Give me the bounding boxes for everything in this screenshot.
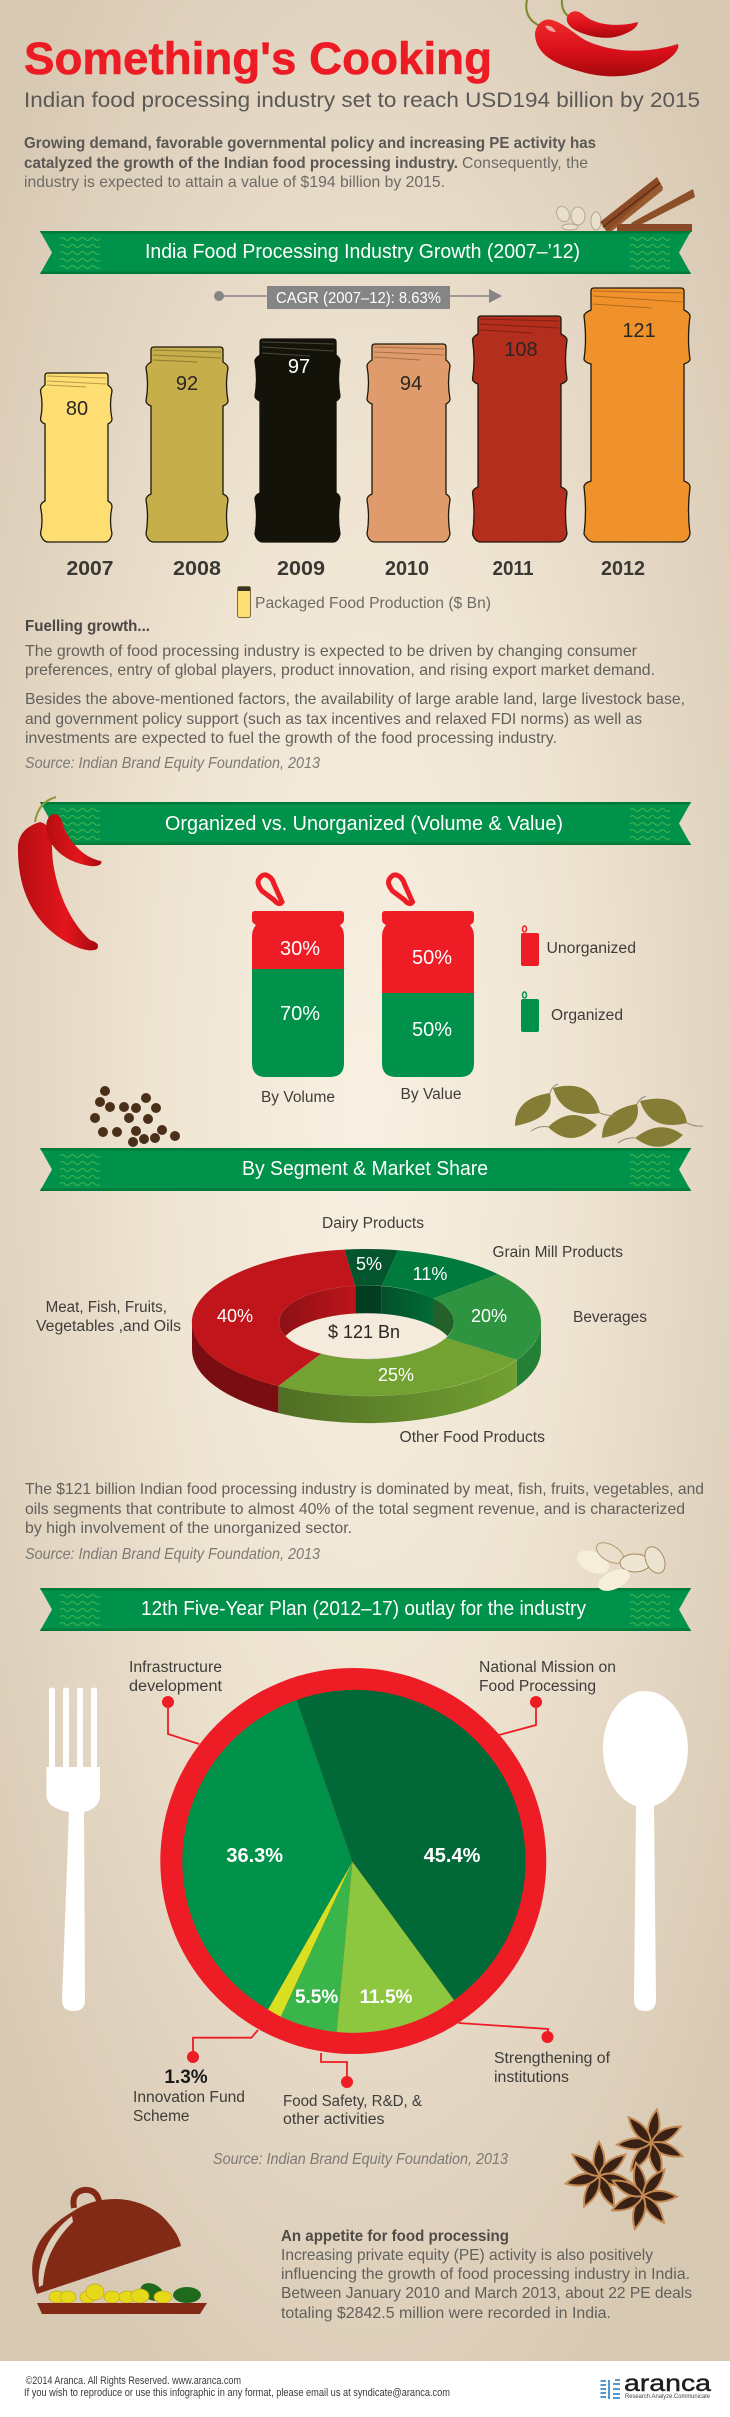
section banner: segment and market share	[40, 1148, 691, 1191]
text block: an appetite for food processing: influencing the growth of food processing industry in India.	[281, 2266, 690, 2283]
pie values: 5.5%	[295, 1987, 338, 2008]
icon: star anise	[565, 2104, 691, 2235]
segment: meat, fish, fruits, vegetables and oils 40%	[192, 1250, 355, 1386]
legend: unorganized: Unorganized	[546, 940, 636, 957]
callout: national mission: National Mission on	[479, 1659, 616, 1676]
bar: 2007	[40, 373, 114, 580]
jar: by volume: 30%	[280, 938, 320, 960]
donut walls	[192, 1322, 541, 1423]
logo: aranca	[600, 2370, 711, 2400]
bar: 2009: 2009	[277, 558, 325, 580]
text block: an appetite for food processing: totaling $2842.5 million were recorded in India.	[281, 2305, 611, 2322]
donut value labels: 25%	[378, 1365, 414, 1385]
text block: fuelling growth: preferences, entry of global players, product innovation, and rising export market demand.	[25, 662, 655, 679]
section banner: organized vs unorganized: Organized vs. Unorganized (Volume & Value)	[165, 813, 563, 835]
segment: dairy products 5%	[344, 1249, 398, 1286]
icon: fork	[46, 1688, 100, 2011]
intro paragraph: Growing demand, favorable governmental policy and increasing PE activity has	[24, 135, 596, 152]
icon: red chillies	[526, 0, 678, 76]
icon: hanging chillies	[18, 797, 101, 950]
text block: segment commentary: by high involvement of the unorganized sector.	[25, 1520, 352, 1537]
subtitle: Indian food processing industry set to reach USD194 billion by 2015	[24, 89, 700, 112]
title: Something's Cooking	[24, 33, 492, 84]
callout: innovation fund	[133, 2030, 258, 2125]
jar: by volume	[252, 875, 344, 1106]
text block: fuelling growth	[25, 618, 685, 772]
legend: unorganized	[521, 926, 636, 966]
bar: 2010: 94	[400, 373, 422, 395]
bar: 2011: 108	[504, 339, 538, 361]
donut value labels: 40%	[217, 1306, 253, 1326]
chart legend: Packaged Food Production ($ Bn)	[255, 595, 491, 612]
legend: organized	[521, 992, 623, 1032]
callout: innovation fund: 1.3%	[164, 2067, 208, 2088]
icon: peppercorns	[90, 1086, 180, 1147]
donut category labels: Other Food Products	[400, 1429, 545, 1446]
bar: 2007: 80	[66, 398, 88, 420]
text block: segment commentary	[25, 1481, 704, 1563]
bar: 2008: 2008	[173, 558, 221, 580]
bar: 2012: 121	[622, 320, 656, 342]
slice: national mission 45.4%	[297, 1690, 526, 2000]
copyright text: ©2014 Aranca. All Rights Reserved. www.aranca.com	[26, 2375, 241, 2387]
icon: spoon	[603, 1691, 688, 2011]
text block: segment commentary: oils segments that contribute to almost 40% of the total segment revenue, and is characterized	[25, 1501, 685, 1518]
pie values	[226, 1845, 481, 2008]
header	[24, 0, 700, 232]
donut value labels: $ 121 Bn	[328, 1322, 400, 1342]
bar chart: packaged food production	[40, 286, 690, 618]
icon: garlic cloves	[573, 1539, 669, 1595]
slice: strengthening of institutions 11.5%	[337, 1862, 454, 2033]
segment: grain mill products 11%	[382, 1250, 498, 1299]
section banner: organized vs unorganized	[40, 802, 691, 845]
icon: cloche with coins and money	[32, 2190, 207, 2314]
text block: fuelling growth: The growth of food processing industry is expected to be driven by changing consumer	[25, 643, 638, 660]
copyright text	[24, 2375, 450, 2399]
source note: Source: Indian Brand Equity Foundation, 2013	[213, 2151, 508, 2168]
callout: infrastructure development	[129, 1659, 223, 1744]
text block: an appetite for food processing: Increasing private equity (PE) activity is also positively	[281, 2247, 653, 2264]
jar: by value	[382, 875, 474, 1103]
text block: fuelling growth: Besides the above-mentioned factors, the availability of large arable land, large livestock base,	[25, 691, 685, 708]
callout: infrastructure development: Infrastructure	[129, 1659, 222, 1676]
intro paragraph: Consequently, the	[462, 155, 588, 172]
icon: bay leaves	[515, 1084, 703, 1147]
donut value labels: 20%	[471, 1306, 507, 1326]
text block: fuelling growth: Source: Indian Brand Equity Foundation, 2013	[25, 755, 320, 772]
donut value labels: 11%	[413, 1264, 447, 1284]
logo: aranca: aranca	[624, 2370, 711, 2396]
bar: 2012: 2012	[601, 558, 645, 580]
bar: 2011: 2011	[492, 558, 534, 580]
legend: organized: Organized	[551, 1007, 623, 1024]
slice: food safety 5.5%	[281, 1862, 352, 2032]
donut value labels	[217, 1254, 507, 1385]
footer	[0, 2361, 730, 2417]
intro paragraph: catalyzed the growth of the Indian food processing industry.	[24, 155, 458, 172]
donut category labels: Vegetables ,and Oils	[36, 1318, 181, 1335]
callout: national mission	[479, 1659, 616, 1735]
text block: an appetite for food processing: An appetite for food processing	[281, 2228, 509, 2245]
coins and banknotes	[49, 2280, 201, 2304]
donut chart: segment market share	[36, 1215, 647, 1446]
bar: 2008	[146, 347, 228, 580]
jar chart: organized vs unorganized	[252, 875, 636, 1106]
jar: by value: By Value	[401, 1086, 461, 1103]
callout: innovation fund: Scheme	[133, 2108, 190, 2125]
donut category labels	[36, 1215, 647, 1446]
icon: cinnamon sticks and cardamom	[554, 177, 695, 232]
donut category labels: Dairy Products	[322, 1215, 424, 1232]
callout: strengthening of institutions: Strengthening of	[494, 2050, 611, 2067]
jar: by volume: By Volume	[261, 1089, 335, 1106]
donut centre	[279, 1286, 454, 1359]
segment: beverages 20%	[433, 1274, 541, 1360]
pie chart: plan outlay on plate	[160, 1668, 546, 2054]
donut category labels: Meat, Fish, Fruits,	[46, 1299, 167, 1316]
donut value labels: 5%	[356, 1254, 382, 1274]
section banner: five-year plan: 12th Five-Year Plan (2012–17) outlay for the industry	[141, 1598, 586, 1620]
bar: 2011	[472, 316, 567, 580]
section banner: segment and market share: By Segment & Market Share	[242, 1158, 488, 1180]
CAGR arrow: CAGR (2007–12): 8.63%	[276, 290, 441, 307]
bar: 2012	[584, 288, 690, 580]
pie values: 11.5%	[360, 1987, 413, 2008]
callout: food safety	[283, 2053, 423, 2128]
pie values: 36.3%	[226, 1845, 283, 1867]
bar: 2007: 2007	[66, 558, 114, 580]
segment: other food products 25%	[278, 1338, 517, 1396]
jar: by value: 50%	[412, 1019, 452, 1041]
bar: 2009	[255, 339, 340, 580]
callout: strengthening of institutions	[459, 2023, 611, 2086]
donut category labels: Grain Mill Products	[492, 1244, 623, 1261]
logo: aranca: Research.Analyze.Communicate	[625, 2393, 710, 2400]
donut category labels: Beverages	[573, 1309, 647, 1326]
bar: 2010	[367, 344, 450, 580]
bar: 2008: 92	[176, 373, 198, 395]
CAGR arrow	[214, 286, 502, 309]
text block: an appetite for food processing: Between January 2010 and March 2013, about 22 PE deals	[281, 2285, 692, 2302]
text block: segment commentary: Source: Indian Brand Equity Foundation, 2013	[25, 1546, 320, 1563]
jar: by volume: 70%	[280, 1003, 320, 1025]
intro paragraph: industry is expected to attain a value of $194 billion by 2015.	[24, 174, 445, 191]
pie values: 45.4%	[424, 1845, 481, 1867]
text block: an appetite for food processing	[281, 2228, 692, 2322]
section banner: growth	[40, 231, 691, 274]
callout: strengthening of institutions: institutions	[494, 2069, 569, 2086]
intro paragraph	[24, 135, 596, 191]
callout: food safety: other activities	[283, 2111, 385, 2128]
plate rim	[160, 1668, 546, 2054]
slice: innovation fund 1.3%	[268, 1862, 352, 2017]
slice: infrastructure 36.3%	[182, 1700, 352, 2010]
jar: by value: 50%	[412, 947, 452, 969]
text block: segment commentary: The $121 billion Indian food processing industry is dominated by meat, fish, fruits, vegetables, and	[25, 1481, 704, 1498]
callout: national mission: Food Processing	[479, 1678, 596, 1695]
text block: fuelling growth: investments are expected to fuel the growth of the food processing industry.	[25, 730, 557, 747]
section banner: growth: India Food Processing Industry Growth (2007–’12)	[145, 241, 580, 263]
callout: food safety: Food Safety, R&D, &	[283, 2093, 423, 2110]
bar: 2009: 97	[288, 356, 310, 378]
callout: innovation fund: Innovation Fund	[133, 2089, 245, 2106]
chart legend	[238, 586, 491, 618]
section banner: five-year plan	[40, 1588, 691, 1631]
text block: fuelling growth: Fuelling growth...	[25, 618, 150, 635]
copyright text: If you wish to reproduce or use this infographic in any format, please email us at syndicate@aranca.com	[24, 2387, 450, 2399]
text block: fuelling growth: and government policy support (such as tax incentives and relaxed FDI norms) as well as	[25, 711, 642, 728]
callout: infrastructure development: development	[129, 1678, 223, 1695]
bar: 2010: 2010	[385, 558, 429, 580]
